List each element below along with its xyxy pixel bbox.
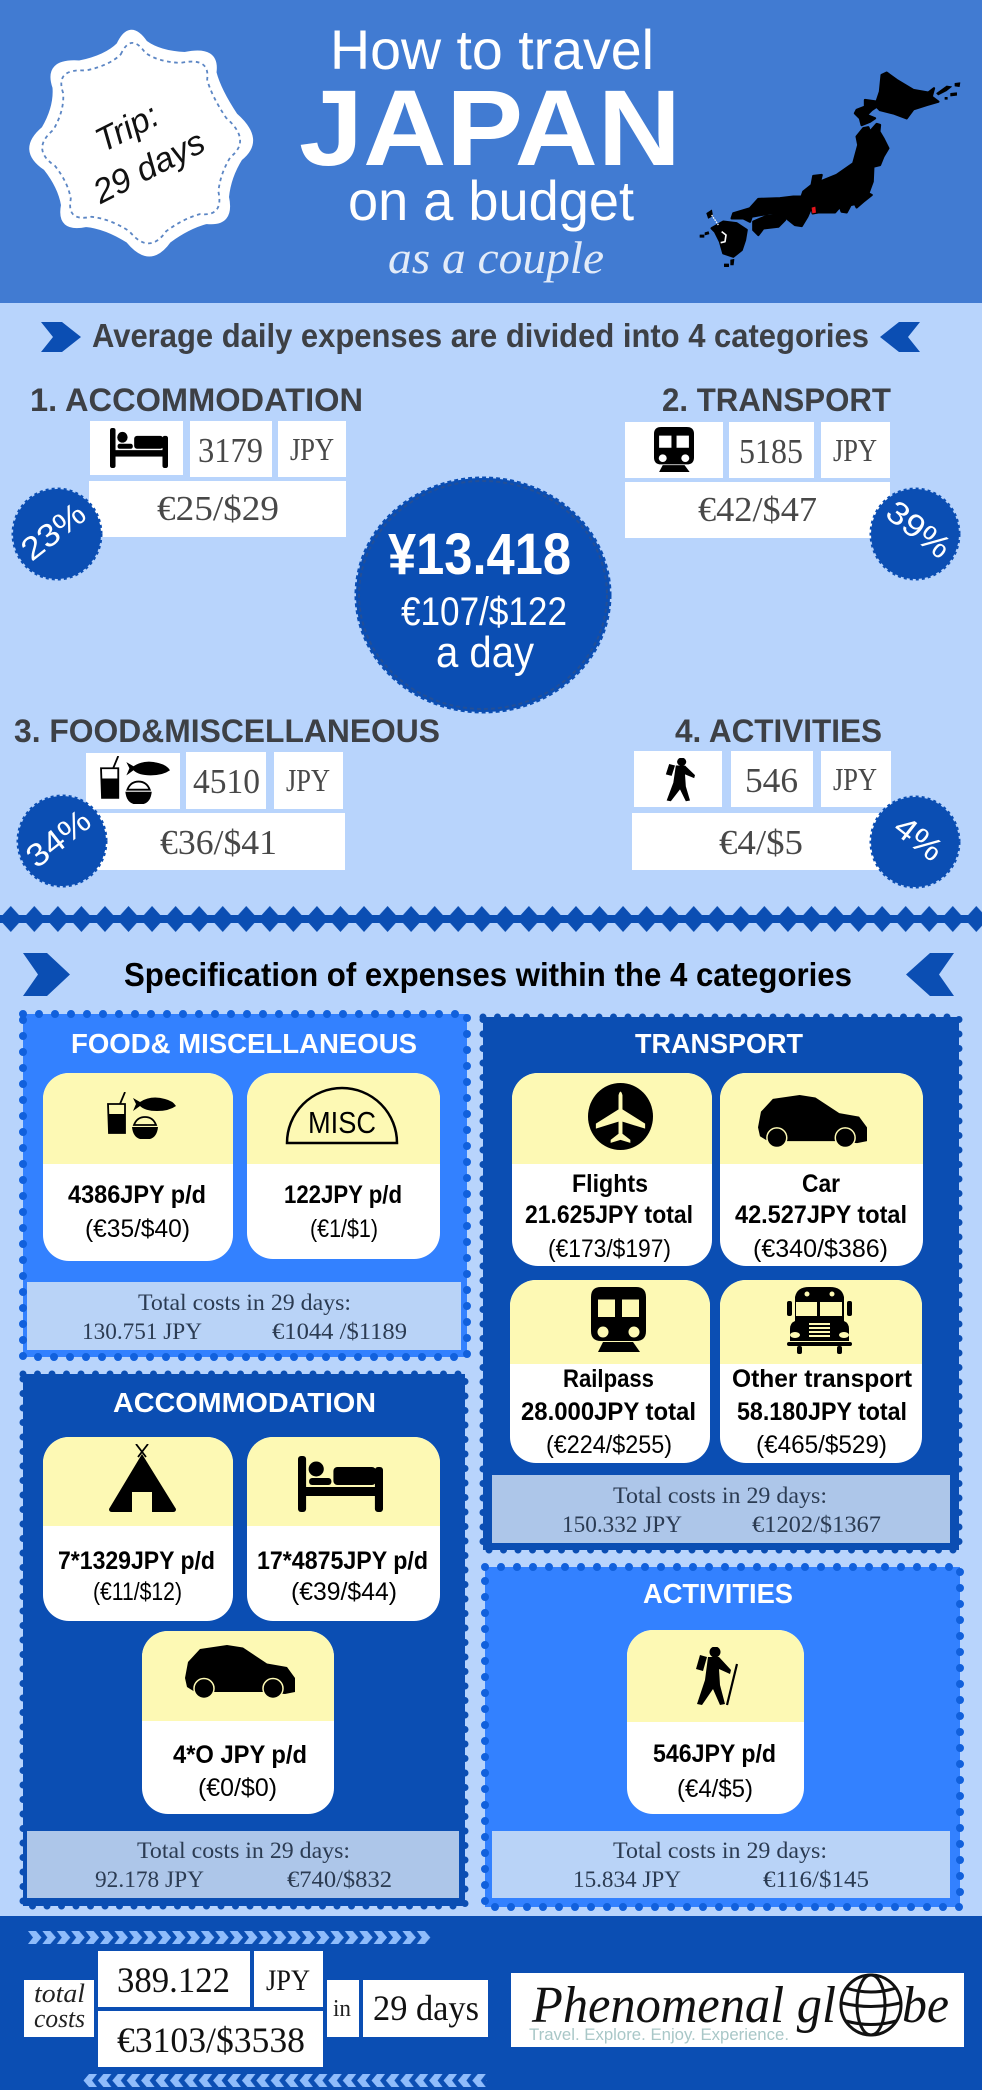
title: on a budget xyxy=(348,169,634,232)
callout: daily total xyxy=(356,478,610,712)
card: hiking: (€4/$5) xyxy=(677,1775,753,1803)
panel: transport summary: 2. TRANSPORT xyxy=(662,382,891,418)
callout: daily total: a day xyxy=(436,628,534,677)
card: car: (€340/$386) xyxy=(753,1235,888,1263)
card: railpass: (€224/$255) xyxy=(546,1431,672,1459)
card: other transport: (€465/$529) xyxy=(756,1431,887,1459)
badge: trip 29 days: Trip: xyxy=(89,96,165,160)
logo: Phenomenal globe: be xyxy=(902,1977,949,2034)
card: hotel bed: (€39/$44) xyxy=(291,1578,397,1606)
total: transport: Total costs in 29 days: xyxy=(613,1483,827,1508)
callout: daily total: ¥13.418 xyxy=(388,522,571,587)
card: flights: (€173/$197) xyxy=(548,1235,671,1263)
panel: transport summary: JPY xyxy=(833,432,877,468)
total in euro and dollar: €3103/$3538 xyxy=(117,2020,305,2060)
icon: walker xyxy=(666,758,695,801)
card: hiking: 546JPY p/d xyxy=(653,1740,776,1768)
card: car sleeping: (€0/$0) xyxy=(198,1774,277,1802)
panel: accommodation summary xyxy=(13,382,363,579)
panel: activities summary: €4/$5 xyxy=(719,823,803,862)
panel: transport summary: 39% xyxy=(879,493,958,566)
panel: accommodation summary: 1. ACCOMMODATION xyxy=(30,382,363,418)
card: tent: 7*1329JPY p/d xyxy=(58,1547,215,1575)
logo: Phenomenal globe: Travel. Explore. Enjoy. Experience. xyxy=(529,2025,789,2044)
total: activities: 15.834 JPY xyxy=(573,1867,681,1892)
icon: bed xyxy=(110,428,168,468)
duration: 29 days xyxy=(373,1988,479,2028)
icon: food and drink xyxy=(101,756,170,804)
card: miscellaneous: 122JPY p/d xyxy=(284,1181,402,1209)
panel: activities summary xyxy=(632,713,959,887)
panel: accommodation summary: JPY xyxy=(290,431,334,467)
total: accommodation: 92.178 JPY xyxy=(95,1867,204,1892)
logo: Phenomenal globe: Phenomenal gl xyxy=(531,1977,836,2034)
panel: transport summary: 5185 xyxy=(739,432,803,471)
total: activities xyxy=(492,1831,950,1898)
panel: transport summary xyxy=(625,382,959,579)
card: other transport xyxy=(720,1280,922,1463)
card: railpass: 28.000JPY total xyxy=(521,1398,696,1426)
total: accommodation: €740/$832 xyxy=(287,1867,392,1892)
card: railpass xyxy=(510,1280,710,1463)
panel: food summary xyxy=(14,713,440,886)
panel: activities xyxy=(485,1567,960,1907)
panel: accommodation summary: 3179 xyxy=(198,431,263,470)
footer band xyxy=(0,1916,982,2090)
total costs label xyxy=(24,1979,94,2037)
panel: food summary: JPY xyxy=(286,762,330,798)
total: transport: 150.332 JPY xyxy=(562,1512,682,1537)
badge: trip 29 days xyxy=(31,32,251,254)
panel: food summary: 34% xyxy=(19,802,98,875)
title: JAPAN xyxy=(299,67,681,188)
total: food xyxy=(27,1282,461,1350)
map of Japan xyxy=(700,73,960,267)
card: food: 4386JPY p/d xyxy=(68,1181,206,1209)
panel: food and miscellaneous xyxy=(23,1014,467,1357)
duration: in xyxy=(333,1996,351,2022)
panel: activities summary: JPY xyxy=(833,761,877,797)
card: railpass: Railpass xyxy=(563,1365,654,1393)
card: car sleeping xyxy=(142,1631,334,1814)
total in JPY: JPY xyxy=(266,1964,310,1997)
title: How to travel xyxy=(330,18,654,81)
total: transport xyxy=(492,1475,950,1543)
card: car sleeping: 4*O JPY p/d xyxy=(173,1741,307,1769)
card: miscellaneous: (€1/$1) xyxy=(310,1215,378,1243)
card: hiking xyxy=(627,1630,804,1814)
logo: Phenomenal globe xyxy=(511,1973,964,2047)
panel: transport xyxy=(483,1017,959,1550)
card: car: 42.527JPY total xyxy=(735,1201,907,1229)
card: hotel bed xyxy=(247,1437,440,1621)
duration xyxy=(327,1980,488,2037)
title: as a couple xyxy=(388,232,604,283)
total costs label: costs xyxy=(34,2004,85,2033)
card: food xyxy=(43,1073,233,1261)
card: miscellaneous: MISC xyxy=(308,1105,376,1140)
card: hotel bed: 17*4875JPY p/d xyxy=(257,1547,428,1575)
badge: trip 29 days: 29 days xyxy=(86,123,211,212)
panel: activities summary: 546 xyxy=(745,761,798,800)
icon: globe xyxy=(841,1975,901,2035)
panel: accommodation summary: 23% xyxy=(14,495,93,568)
heading: accommodation: ACCOMMODATION xyxy=(113,1387,376,1418)
card: food: (€35/$40) xyxy=(85,1215,190,1243)
panel: food summary: €36/$41 xyxy=(160,823,277,862)
total in euro and dollar xyxy=(98,2011,323,2067)
total in JPY: 389.122 xyxy=(117,1960,230,2000)
icon: train xyxy=(654,427,694,472)
card: other transport: 58.180JPY total xyxy=(737,1398,907,1426)
total in JPY xyxy=(98,1951,323,2007)
panel: food summary: 4510 xyxy=(193,762,260,801)
callout: daily total: €107/$122 xyxy=(401,590,567,634)
total costs label: total xyxy=(34,1979,85,2008)
total: food: Total costs in 29 days: xyxy=(138,1290,351,1315)
heading: food: FOOD& MISCELLANEOUS xyxy=(71,1028,417,1059)
panel: activities summary: 4% xyxy=(887,808,950,869)
heading: transport: TRANSPORT xyxy=(635,1028,803,1059)
card: flights: Flights xyxy=(572,1170,648,1198)
panel: accommodation summary: €25/$29 xyxy=(157,489,279,528)
card: tent: (€11/$12) xyxy=(93,1578,182,1606)
card: tent xyxy=(43,1437,233,1621)
card: other transport: Other transport xyxy=(732,1365,913,1393)
total: activities: Total costs in 29 days: xyxy=(613,1838,827,1863)
card: car xyxy=(720,1073,923,1266)
total: accommodation xyxy=(27,1831,459,1898)
heading: specification: Specification of expenses within the 4 categories xyxy=(124,956,852,993)
heading: activities: ACTIVITIES xyxy=(643,1578,793,1609)
panel: accommodation xyxy=(23,1374,465,1906)
heading: daily expenses: Average daily expenses are divided into 4 categories xyxy=(92,317,869,354)
panel: food summary: 3. FOOD&MISCELLANEOUS xyxy=(14,713,440,749)
card: car: Car xyxy=(802,1170,840,1198)
total: transport: €1202/$1367 xyxy=(752,1512,881,1537)
card: miscellaneous xyxy=(247,1073,440,1259)
total: accommodation: Total costs in 29 days: xyxy=(137,1838,350,1863)
card: flights xyxy=(512,1073,712,1266)
total: activities: €116/$145 xyxy=(763,1867,869,1892)
title xyxy=(299,18,681,283)
total: food: 130.751 JPY xyxy=(82,1319,202,1344)
panel: activities summary: 4. ACTIVITIES xyxy=(675,713,882,749)
header band xyxy=(0,0,982,303)
panel: transport summary: €42/$47 xyxy=(698,490,817,529)
card: flights: 21.625JPY total xyxy=(525,1201,693,1229)
total: food: €1044 /$1189 xyxy=(272,1319,407,1344)
